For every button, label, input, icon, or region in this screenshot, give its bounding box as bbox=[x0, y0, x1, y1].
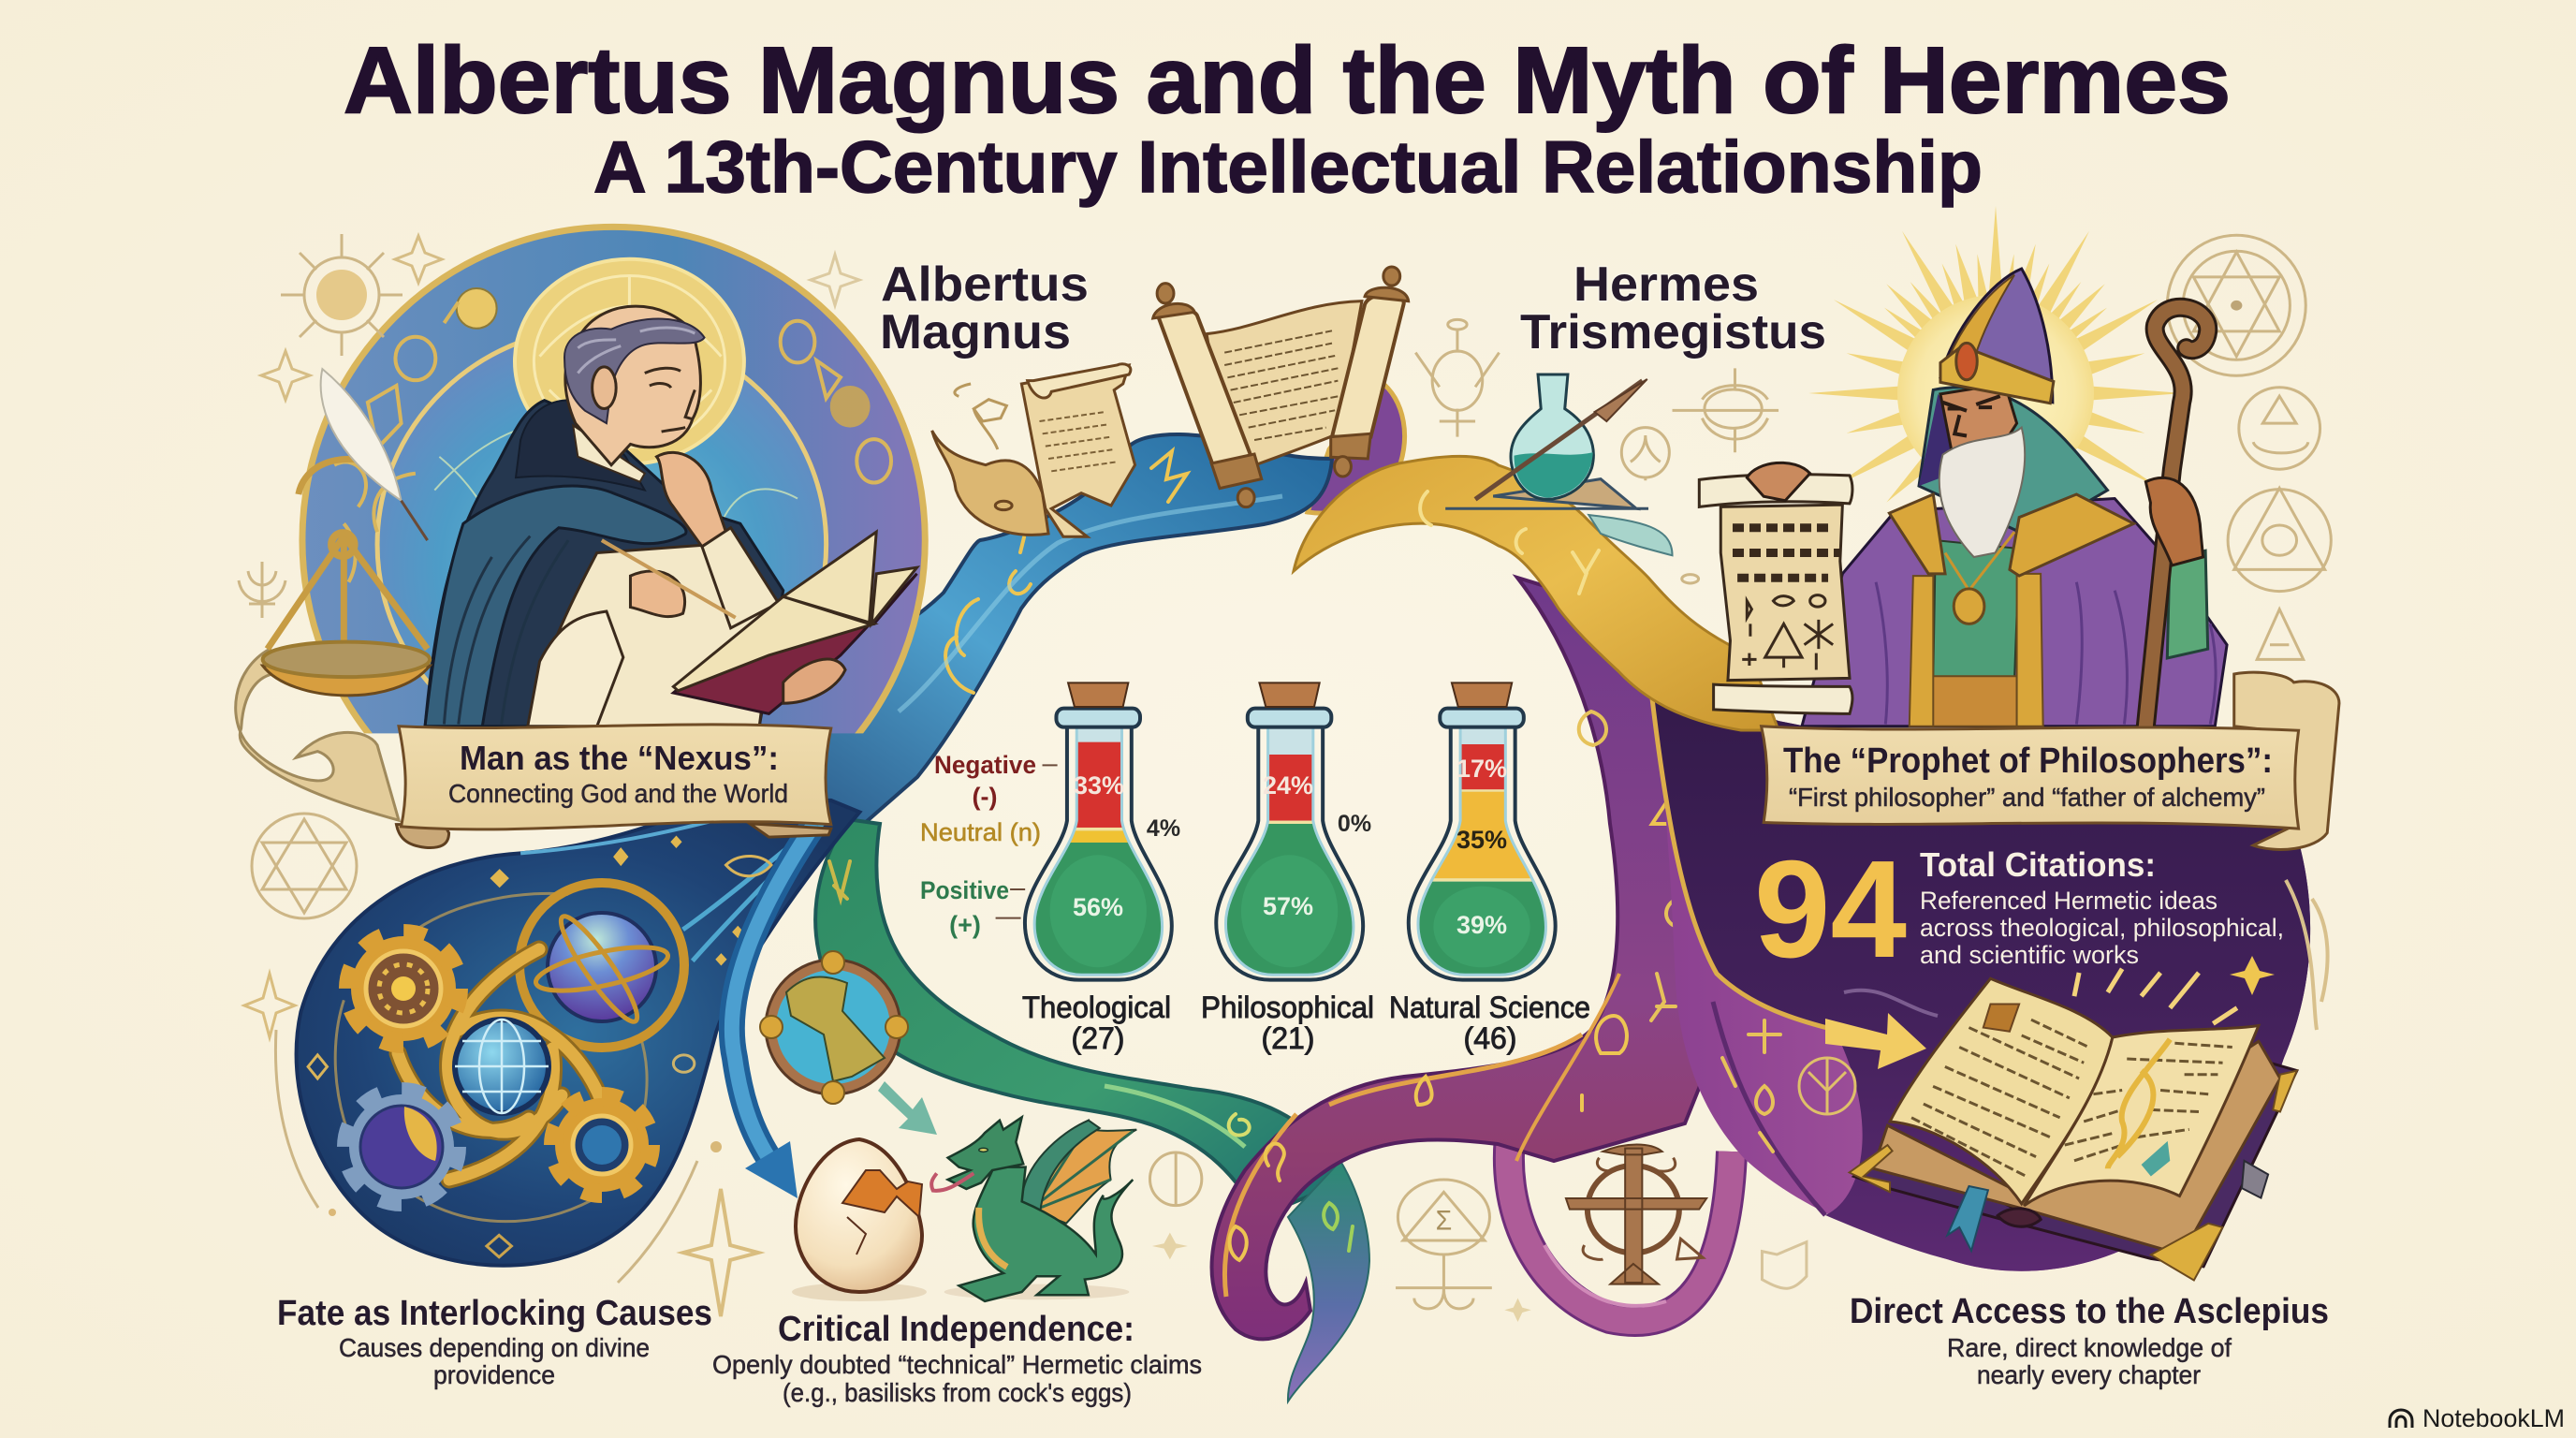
stat: 94 total citations: Referenced Hermetic ideas bbox=[1920, 887, 2217, 915]
icon: faint symbols right bbox=[2167, 235, 2331, 659]
pen bbox=[602, 540, 736, 618]
pendant bbox=[1945, 532, 2014, 591]
arrow: gold to book bbox=[1825, 1013, 1926, 1069]
robe bbox=[530, 545, 774, 726]
book hand bbox=[783, 659, 845, 703]
text: Prophet banner: “First philosopher” and “father of alchemy” bbox=[1789, 783, 2265, 812]
icon: faint symbols center bottom: Σ bbox=[1436, 1206, 1452, 1236]
heading: Albertus Magnus bbox=[880, 257, 1089, 360]
text: fate caption: Fate as Interlocking Causes bbox=[277, 1294, 712, 1333]
values: flask percentages: 0% bbox=[1338, 811, 1371, 837]
icon: globe bbox=[760, 951, 908, 1104]
scroll roller top bbox=[1699, 475, 1852, 506]
flask Natural Science bbox=[1406, 682, 1558, 982]
spine rays bbox=[2074, 969, 2237, 1023]
legend leader lines bbox=[996, 765, 1058, 918]
stat: 94 total citations: 94 bbox=[1754, 832, 1907, 987]
ground shadow bbox=[944, 1284, 1129, 1299]
wing membrane bbox=[1030, 1121, 1136, 1224]
sash bbox=[1931, 676, 2017, 726]
stat: 94 total citations: Total Citations: bbox=[1920, 845, 2156, 884]
values: flask percentages: 4% bbox=[1147, 815, 1180, 842]
sleeve bbox=[528, 611, 623, 726]
heading: Hermes Trismegistus: Trismegistus bbox=[1520, 305, 1826, 360]
icon: large scroll bbox=[1153, 267, 1409, 507]
cover bbox=[1854, 1059, 2297, 1267]
flask Philosophical bbox=[1214, 682, 1365, 982]
heading: Hermes Trismegistus: Hermes bbox=[1573, 257, 1759, 312]
corners bbox=[1850, 1071, 2297, 1280]
icon: medallion around Albertus bbox=[299, 223, 929, 734]
icon: gold ring around planet bbox=[520, 883, 684, 1048]
labels: flask categories: (21) bbox=[1262, 1021, 1314, 1055]
values: flask percentages: 39% bbox=[1456, 911, 1507, 939]
heading: Albertus Magnus: Albertus bbox=[881, 257, 1089, 312]
book cover bbox=[673, 574, 917, 713]
clasp bbox=[1998, 1209, 2041, 1226]
head bbox=[948, 1117, 1023, 1189]
text: critical independence caption: Openly doubted “technical” Hermetic claims bbox=[712, 1350, 1202, 1379]
text: critical independence caption: Critical Independence: bbox=[778, 1310, 1134, 1349]
mitre band bbox=[1940, 346, 2054, 404]
forearm bbox=[702, 528, 779, 628]
icon: faint symbols left bbox=[239, 234, 859, 1316]
icon: gear steel with sphere bbox=[347, 1093, 456, 1201]
ribbon: magenta loop bbox=[1509, 1123, 1732, 1321]
scale hub bbox=[331, 533, 355, 556]
values: flask percentages: 35% bbox=[1456, 826, 1507, 854]
right page bbox=[2024, 1025, 2259, 1206]
hood shadow bbox=[1919, 394, 1953, 486]
text: fate caption: Causes depending on divine bbox=[339, 1333, 650, 1362]
values: flask percentages: 57% bbox=[1263, 892, 1313, 920]
book pages bbox=[673, 532, 917, 691]
staff hand bbox=[2145, 477, 2203, 565]
hood bbox=[1919, 388, 2108, 536]
text: Prophet banner: The “Prophet of Philosophers”: bbox=[1783, 741, 2273, 781]
icon: interlocking gold bands bbox=[398, 949, 601, 1180]
flask Theological bbox=[1022, 682, 1174, 982]
icon: gear sun bbox=[349, 934, 458, 1043]
text: fate caption: providence bbox=[433, 1360, 555, 1389]
subtitle: A 13th-Century Intellectual Relationship bbox=[593, 125, 1983, 208]
text: critical independence caption: (e.g., basilisks from cock's eggs) bbox=[783, 1378, 1132, 1407]
hair bbox=[564, 319, 705, 423]
labels: flask categories: (46) bbox=[1464, 1021, 1516, 1055]
text: Asclepius caption: Rare, direct knowledge of bbox=[1947, 1333, 2232, 1362]
text: Prophet banner bbox=[1783, 741, 2273, 812]
heading: Hermes Trismegistus bbox=[1520, 257, 1826, 360]
belly bbox=[979, 1208, 1007, 1267]
body bbox=[959, 1167, 1133, 1301]
legend: sentiment labels: Negative bbox=[934, 751, 1036, 779]
scroll glyph rows bbox=[1733, 528, 1840, 578]
page block bbox=[1873, 1041, 2280, 1255]
banner: Man as the Nexus bbox=[396, 725, 831, 847]
eye bbox=[979, 1148, 988, 1152]
icon: scales and quill bbox=[236, 369, 430, 820]
jewel bbox=[1956, 343, 1977, 380]
panel: citations blob bbox=[1647, 674, 2310, 1271]
icon: faint alchemical symbols top bbox=[1415, 319, 1778, 583]
wing ribs bbox=[1036, 1123, 1133, 1208]
ribbon: gold path from Hermes bbox=[1294, 456, 1778, 730]
icon: gold bands highlight bbox=[398, 949, 601, 1180]
labels: flask categories bbox=[1022, 990, 1590, 1055]
text: Asclepius caption bbox=[1850, 1292, 2329, 1389]
logo: NotebookLM: NotebookLM bbox=[2422, 1404, 2565, 1432]
wing leading edge bbox=[1022, 1121, 1100, 1211]
scroll glyphs bbox=[1742, 595, 1833, 670]
left page bbox=[1890, 978, 2113, 1204]
scale frame bbox=[268, 459, 428, 657]
banner: Prophet of Philosophers bbox=[1762, 672, 2339, 849]
values: flask percentages: 17% bbox=[1456, 755, 1507, 783]
heading: Albertus Magnus: Magnus bbox=[880, 305, 1071, 360]
ribbon: blue path from Albertus bbox=[739, 434, 1332, 843]
face details bbox=[645, 368, 695, 432]
text: Nexus banner: Man as the “Nexus”: bbox=[460, 739, 779, 777]
icon: small scroll bbox=[932, 364, 1135, 536]
labels: flask categories: Natural Science bbox=[1389, 990, 1590, 1024]
stat: 94 total citations: and scientific works bbox=[1920, 941, 2139, 969]
hood bbox=[516, 400, 645, 491]
legend: sentiment labels: Positive bbox=[920, 876, 1009, 904]
sash bbox=[425, 486, 686, 726]
icon: cracked egg bbox=[792, 1139, 927, 1301]
labels: flask categories: (27) bbox=[1072, 1021, 1124, 1055]
initial bbox=[1983, 1004, 2019, 1032]
figure: Albertus Magnus bbox=[425, 306, 917, 726]
seal bbox=[2142, 1141, 2170, 1177]
head bbox=[565, 306, 700, 465]
text: fate caption bbox=[277, 1294, 712, 1389]
icon: dragon bbox=[931, 1117, 1136, 1301]
writing hand bbox=[630, 571, 685, 617]
text: Nexus banner: Connecting God and the World bbox=[448, 779, 788, 808]
bookmark blue bbox=[1947, 1186, 1988, 1251]
legend: sentiment labels: (-) bbox=[973, 783, 997, 811]
ribbon: plum main bbox=[1212, 578, 1760, 1339]
parchment tail left bbox=[236, 649, 399, 820]
text lines right bbox=[2065, 1043, 2232, 1161]
legend: sentiment labels: (+) bbox=[949, 911, 981, 939]
scale pan bbox=[263, 666, 430, 696]
title: Albertus Magnus and the Myth of Hermes bbox=[344, 28, 2231, 133]
icon: purple planet bbox=[533, 909, 671, 1029]
face bbox=[1940, 384, 2017, 457]
labels: flask categories: Theological bbox=[1022, 990, 1171, 1024]
collar left bbox=[1889, 494, 1945, 574]
icon: bronze cross symbol bbox=[1566, 1144, 1706, 1284]
staff bbox=[2145, 307, 2208, 726]
figure: sun rays behind Hermes bbox=[1808, 206, 2183, 507]
robe bbox=[1802, 498, 2227, 726]
collar right bbox=[2010, 494, 2134, 576]
icon: flask and quill bbox=[1445, 374, 1673, 555]
labels: flask categories: Philosophical bbox=[1201, 990, 1374, 1024]
quill bbox=[321, 369, 402, 501]
tongue bbox=[931, 1173, 973, 1191]
ribbon: purple crescent behind scroll bbox=[1308, 381, 1405, 513]
collar bbox=[573, 425, 645, 482]
mitre stripe bbox=[1943, 275, 2014, 374]
cloak bbox=[425, 401, 783, 726]
panel: fate blob bbox=[297, 800, 859, 1266]
legend: sentiment labels bbox=[920, 751, 1041, 939]
staff core bbox=[2145, 307, 2208, 726]
beard bbox=[1939, 428, 2025, 557]
ribbon: green path bbox=[815, 819, 1348, 1217]
ear bbox=[593, 367, 616, 409]
ribbon: green tail bbox=[1288, 1161, 1369, 1401]
values: flask percentages: 33% bbox=[1074, 771, 1124, 800]
figure: Hermes Trismegistus bbox=[1699, 269, 2227, 726]
stat: 94 total citations bbox=[1754, 832, 2284, 987]
grey tag bbox=[2242, 1161, 2268, 1198]
values: flask percentages bbox=[1073, 755, 1507, 939]
decorative strokes right of blob bbox=[2286, 880, 2328, 1030]
text lines left bbox=[1911, 1020, 2088, 1177]
scroll roller bottom bbox=[1714, 684, 1852, 713]
chin hand bbox=[657, 452, 726, 547]
scroll hand bbox=[1747, 462, 1810, 501]
values: flask percentages: 24% bbox=[1263, 771, 1313, 800]
gold stripes bbox=[1910, 574, 2043, 726]
icon: gear gold with orb bbox=[553, 1096, 651, 1194]
tunic bbox=[1933, 540, 2019, 678]
serpent glyph bbox=[2108, 1039, 2170, 1168]
chart: sentiment flasks bbox=[996, 682, 1581, 983]
scroll body bbox=[1720, 505, 1850, 681]
stat: 94 total citations: across theological, philosophical, bbox=[1920, 914, 2284, 942]
eyes and brows bbox=[1943, 396, 2000, 436]
icon: central globe bbox=[455, 1020, 549, 1113]
icon: open book bbox=[1850, 969, 2297, 1280]
mitre bbox=[1940, 269, 2053, 403]
pan rim bbox=[263, 642, 430, 677]
quill shaft bbox=[402, 501, 428, 540]
icon: faint symbols center bottom bbox=[1149, 1152, 1807, 1322]
green sleeve bbox=[2167, 550, 2208, 658]
hair streaks bbox=[578, 328, 695, 374]
values: flask percentages: 56% bbox=[1073, 893, 1123, 921]
text: Asclepius caption: nearly every chapter bbox=[1977, 1360, 2201, 1389]
arrow: blue arrow to egg bbox=[732, 824, 814, 1198]
text: critical independence caption bbox=[712, 1310, 1202, 1407]
text: Asclepius caption: Direct Access to the Asclepius bbox=[1850, 1292, 2329, 1331]
robe folds bbox=[1876, 582, 2216, 725]
pendant disc bbox=[1954, 589, 1984, 624]
text: Nexus banner bbox=[448, 739, 788, 808]
legend: sentiment labels: Neutral (n) bbox=[920, 818, 1041, 846]
arrow: teal arrow to dragon bbox=[878, 1081, 937, 1135]
cloak folds bbox=[444, 536, 568, 725]
